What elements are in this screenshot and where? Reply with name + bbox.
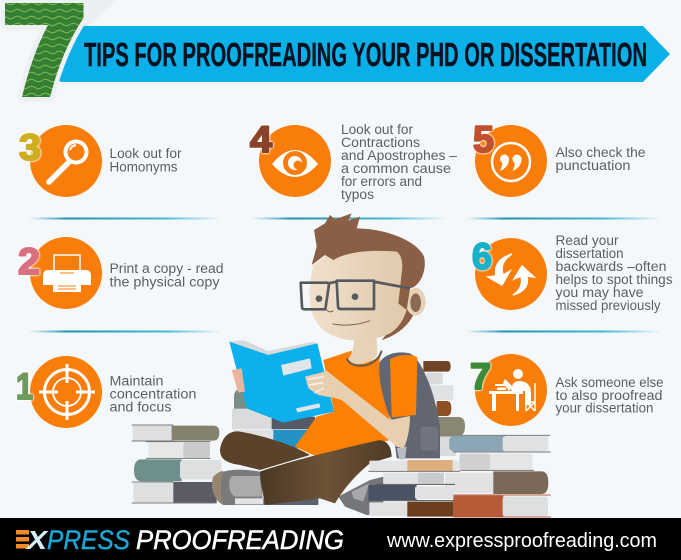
- book: rust: [453, 495, 551, 517]
- number 1: 1: [16, 366, 33, 407]
- arm and hand: [307, 371, 410, 448]
- tip text: helps to spot things: [556, 272, 673, 287]
- neck: [347, 338, 377, 364]
- icon: reverse arrows: [475, 238, 547, 310]
- tip text: Read your: [556, 233, 619, 248]
- logo E stripes: [16, 530, 29, 548]
- tip text: Also check the: [556, 145, 646, 160]
- book: brown: [369, 502, 453, 517]
- book: navy: [368, 485, 454, 501]
- tip text: Print a copy - read: [110, 261, 224, 276]
- left book stack: [132, 425, 222, 503]
- books behind the student: [232, 361, 460, 456]
- title banner: [5, 0, 670, 97]
- book: tan: [368, 460, 460, 471]
- ear: [406, 288, 426, 316]
- glasses: [301, 281, 410, 309]
- tip text: you may have: [556, 285, 644, 300]
- icon: quotation marks: [475, 125, 547, 197]
- tip text: Maintain: [110, 374, 164, 388]
- book 4: [132, 482, 217, 503]
- front book stack: [368, 460, 460, 517]
- backpack: [378, 352, 440, 459]
- tip 5: punctuation: [473, 119, 646, 197]
- banner arrow: [57, 26, 670, 82]
- tip 4: contractions: [250, 119, 458, 202]
- book: blue-grey: [448, 435, 551, 452]
- number 3: 3: [19, 127, 41, 168]
- tip text: to also proofread: [556, 388, 662, 403]
- book: taupe: [445, 471, 548, 494]
- book 1: [132, 425, 219, 441]
- number 7: 7: [470, 356, 491, 397]
- head: [301, 213, 426, 340]
- trousers: [220, 431, 392, 505]
- footer bar: [0, 518, 681, 560]
- book 2: [146, 442, 211, 458]
- tip 7: ask someone else: [470, 354, 664, 426]
- tip text: Look out for: [341, 122, 414, 137]
- lower hair: [382, 300, 413, 340]
- student character: [212, 213, 440, 515]
- tip 3: homonyms: [19, 125, 182, 197]
- number 4: 4: [250, 119, 272, 160]
- icon: printer: [30, 237, 102, 309]
- collar: [347, 351, 382, 366]
- number 2: 2: [18, 241, 40, 282]
- hair: [312, 213, 425, 310]
- tip text: for errors and: [341, 174, 422, 189]
- tip text: the physical copy: [110, 274, 220, 290]
- tip text: concentration: [110, 386, 196, 402]
- tip text: punctuation: [556, 158, 630, 173]
- right book stack: [430, 417, 551, 517]
- tip text: Homonyms: [110, 160, 178, 174]
- separator lines: [28, 218, 662, 332]
- eyes: [316, 293, 358, 302]
- book: pale: [377, 473, 455, 484]
- book: pale: [458, 454, 534, 470]
- logo: [16, 525, 344, 555]
- tip text: and focus: [110, 400, 172, 414]
- tip text: typos: [341, 187, 374, 202]
- hands on book: [232, 368, 342, 398]
- tip 6: read backwards: [472, 233, 673, 313]
- number 5: 5: [473, 119, 494, 160]
- icon: person at desk: [475, 354, 547, 426]
- left shoe: [212, 470, 263, 505]
- tip text: Contractions: [341, 135, 420, 150]
- tip text: missed previously: [556, 298, 661, 313]
- icon: eye: [259, 125, 331, 197]
- website url: www.expressproofreading.com: [386, 530, 657, 552]
- right shoe: [263, 477, 383, 515]
- tip text: Look out for: [110, 146, 182, 161]
- number 6: 6: [472, 236, 492, 277]
- tip 1: concentration: [16, 356, 196, 428]
- tip text: dissertation: [556, 246, 624, 261]
- logo X: X: [25, 525, 49, 555]
- tip text: a common cause: [341, 161, 451, 176]
- tip text: and Apostrophes –: [341, 148, 458, 163]
- logo PRESS: PRESS: [47, 525, 130, 555]
- sleeve: [390, 355, 417, 417]
- tip 2: print a copy: [18, 237, 224, 309]
- book 3: [134, 459, 222, 481]
- open book: [229, 340, 334, 423]
- t-shirt: [295, 351, 392, 457]
- icon: target: [30, 356, 102, 428]
- nose and mouth: [327, 310, 370, 325]
- big number 7: [5, 0, 117, 97]
- book: olive top: [430, 417, 465, 455]
- face: [309, 243, 410, 340]
- tip text: Ask someone else: [556, 375, 664, 390]
- icon: magnifying glass: [30, 125, 102, 197]
- logo PROOFREADING: PROOFREADING: [136, 525, 344, 555]
- tip text: your dissertation: [556, 400, 654, 416]
- tip text: backwards –often: [556, 259, 666, 274]
